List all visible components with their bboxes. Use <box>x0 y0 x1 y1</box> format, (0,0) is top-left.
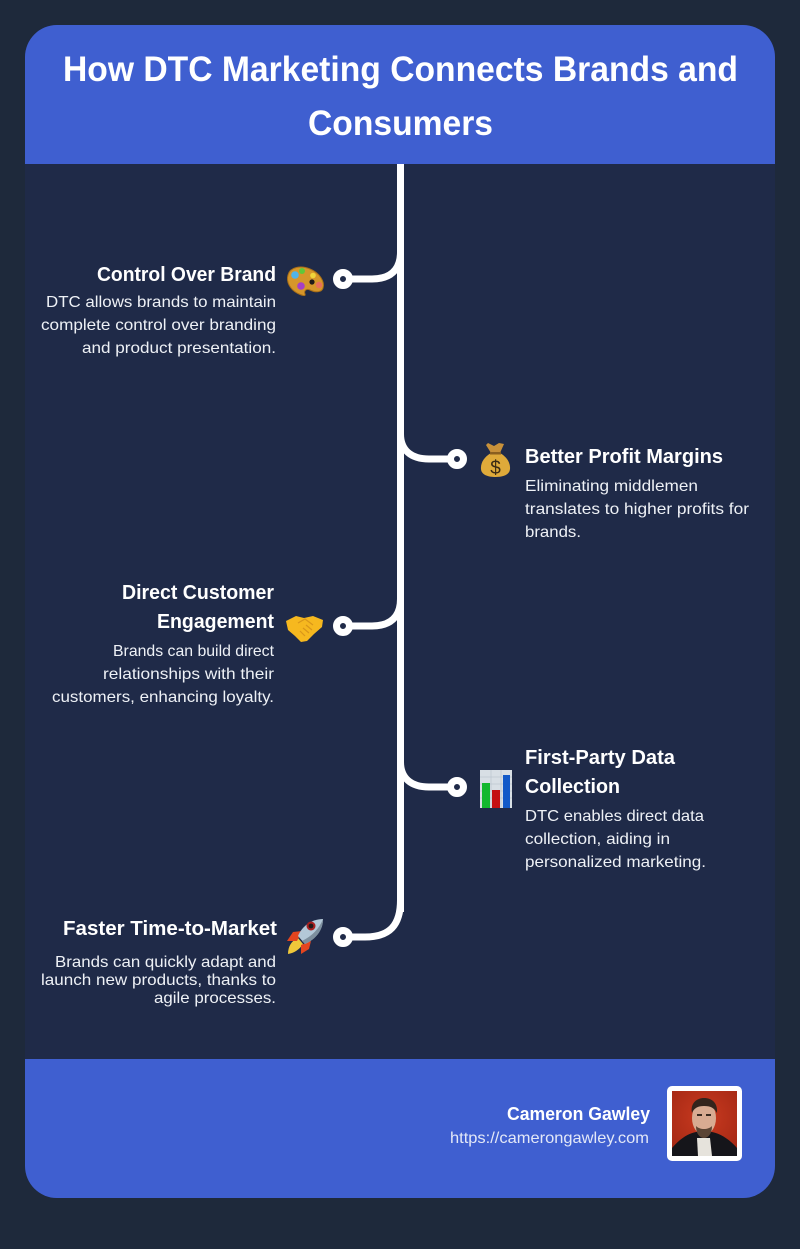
icon: rocket <box>287 919 323 954</box>
item: Better Profit Margins: Better Profit Margins <box>525 446 723 468</box>
footer author: https://camerongawley.com <box>450 1130 649 1147</box>
item: Direct Customer Engagement: relationships with their <box>103 666 275 683</box>
title: How DTC Marketing Connects Brands and <box>63 50 738 89</box>
timeline connector <box>336 164 464 944</box>
icon: money bag <box>481 443 510 479</box>
item: Faster Time-to-Market: launch new products, thanks to <box>41 972 276 989</box>
item: Direct Customer Engagement: Engagement <box>157 611 274 633</box>
avatar <box>667 1086 742 1161</box>
item: First-Party Data Collection: Collection <box>525 776 620 798</box>
item: Direct Customer Engagement: Direct Customer <box>122 582 274 604</box>
item: First-Party Data Collection: personalized marketing. <box>525 854 706 871</box>
item: Direct Customer Engagement: customers, enhancing loyalty. <box>52 689 274 706</box>
icon: money bag: $ <box>490 458 501 479</box>
item: Control Over Brand: DTC allows brands to maintain <box>46 294 276 311</box>
item: First-Party Data Collection: collection, aiding in <box>525 831 670 848</box>
item: First-Party Data Collection: First-Party Data <box>525 747 676 769</box>
item: Control Over Brand: and product presentation. <box>82 340 276 357</box>
item: Faster Time-to-Market: agile processes. <box>154 990 276 1007</box>
item: First-Party Data Collection: DTC enables direct data <box>525 808 704 825</box>
item: Faster Time-to-Market: Brands can quickly adapt and <box>55 954 276 971</box>
title <box>63 50 738 143</box>
item: Faster Time-to-Market <box>41 918 277 1007</box>
item: Direct Customer Engagement: Brands can build direct <box>113 643 275 660</box>
item: Control Over Brand: complete control over branding <box>41 317 276 334</box>
item: Faster Time-to-Market: Faster Time-to-Market <box>63 918 277 940</box>
item: Better Profit Margins: translates to higher profits for <box>525 501 750 518</box>
footer author <box>450 1104 650 1147</box>
item: Control Over Brand <box>41 264 276 357</box>
icon: palette <box>287 267 323 296</box>
icon: handshake <box>286 616 323 642</box>
title: Consumers <box>308 104 493 143</box>
icon: bar chart <box>480 770 512 808</box>
item: Better Profit Margins <box>525 446 750 541</box>
footer author: Cameron Gawley <box>507 1104 650 1124</box>
item: First-Party Data Collection <box>525 747 706 871</box>
item: Better Profit Margins: Eliminating middlemen <box>525 478 698 495</box>
item: Direct Customer Engagement <box>52 582 275 706</box>
item: Control Over Brand: Control Over Brand <box>97 264 276 286</box>
item: Better Profit Margins: brands. <box>525 524 581 541</box>
